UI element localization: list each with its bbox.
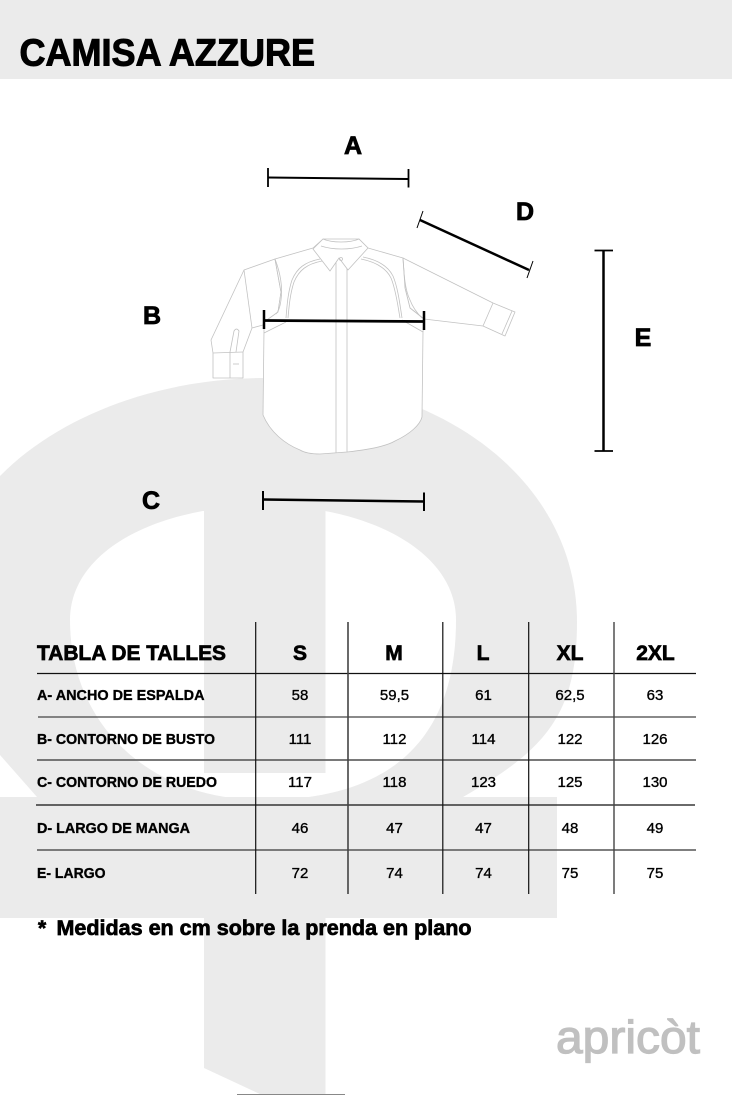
row B: contorno de busto: B- CONTORNO DE BUSTO [37, 731, 215, 748]
row A: ancho de espalda: 61 [475, 687, 492, 704]
header band [0, 0, 732, 79]
dimension C [142, 487, 424, 515]
table header row: L [477, 642, 490, 665]
dimension D [417, 198, 534, 278]
dimension E: E [635, 324, 651, 352]
row B: contorno de busto: 114 [472, 731, 495, 748]
row B: contorno de busto: 112 [383, 731, 406, 748]
size table [36, 622, 696, 894]
row B: contorno de busto: 111 [289, 731, 311, 748]
row C: contorno de ruedo: 118 [383, 774, 406, 791]
table header row: XL [557, 642, 584, 665]
title: CAMISA AZZURE [20, 32, 315, 74]
row A: ancho de espalda: 63 [647, 687, 663, 704]
background watermark: logo monogram [0, 378, 577, 1095]
row C: contorno de ruedo: 130 [642, 774, 668, 791]
row D: largo de manga: 47 [475, 820, 492, 837]
row E: largo: 74 [386, 865, 403, 882]
shirt right sleeve [403, 258, 515, 336]
row B: contorno de busto: 126 [642, 731, 668, 748]
row E: largo: 75 [647, 865, 663, 882]
row A: ancho de espalda [37, 687, 663, 704]
dimension B [143, 302, 424, 330]
row B: contorno de busto: 122 [557, 731, 583, 748]
dimension D: D [516, 198, 534, 226]
footnote: Medidas en cm sobre la prenda en plano [56, 917, 472, 940]
row C: contorno de ruedo: 117 [288, 774, 312, 791]
row A: ancho de espalda: 59,5 [380, 687, 409, 704]
row D: largo de manga: 46 [292, 820, 308, 837]
shirt body [263, 239, 424, 454]
table header row: TABLA DE TALLES [37, 642, 226, 665]
row D: largo de manga: 49 [647, 820, 663, 837]
brand logo: apricòt [556, 1011, 700, 1063]
dimension A: A [344, 132, 362, 160]
shirt left sleeve [211, 259, 281, 378]
row C: contorno de ruedo: 125 [557, 774, 583, 791]
footnote: * [38, 917, 47, 940]
row E: largo: 75 [562, 865, 578, 882]
row D: largo de manga [37, 820, 663, 837]
row D: largo de manga: D- LARGO DE MANGA [37, 820, 190, 837]
row D: largo de manga: 48 [562, 820, 578, 837]
shirt collar [313, 239, 368, 271]
row D: largo de manga: 47 [386, 820, 403, 837]
shirt technical drawing [211, 239, 515, 454]
row E: largo: E- LARGO [37, 865, 106, 882]
row E: largo: 74 [475, 865, 492, 882]
row B: contorno de busto [37, 731, 668, 748]
table header row: 2XL [636, 642, 675, 665]
row A: ancho de espalda: 58 [292, 687, 308, 704]
row A: ancho de espalda: 62,5 [555, 687, 585, 704]
dimension B: B [143, 302, 161, 330]
row C: contorno de ruedo: 123 [471, 774, 496, 791]
dimension E [594, 250, 651, 451]
dimension A [268, 132, 408, 188]
row E: largo [37, 865, 663, 882]
table grid lines [36, 622, 696, 894]
table header row: S [293, 642, 307, 665]
row C: contorno de ruedo [37, 774, 668, 791]
table header row: M [385, 642, 403, 665]
dimension C: C [142, 487, 160, 515]
row A: ancho de espalda: A- ANCHO DE ESPALDA [37, 687, 205, 704]
row E: largo: 72 [292, 865, 308, 882]
row C: contorno de ruedo: C- CONTORNO DE RUEDO [37, 774, 217, 791]
table header row [37, 642, 675, 665]
